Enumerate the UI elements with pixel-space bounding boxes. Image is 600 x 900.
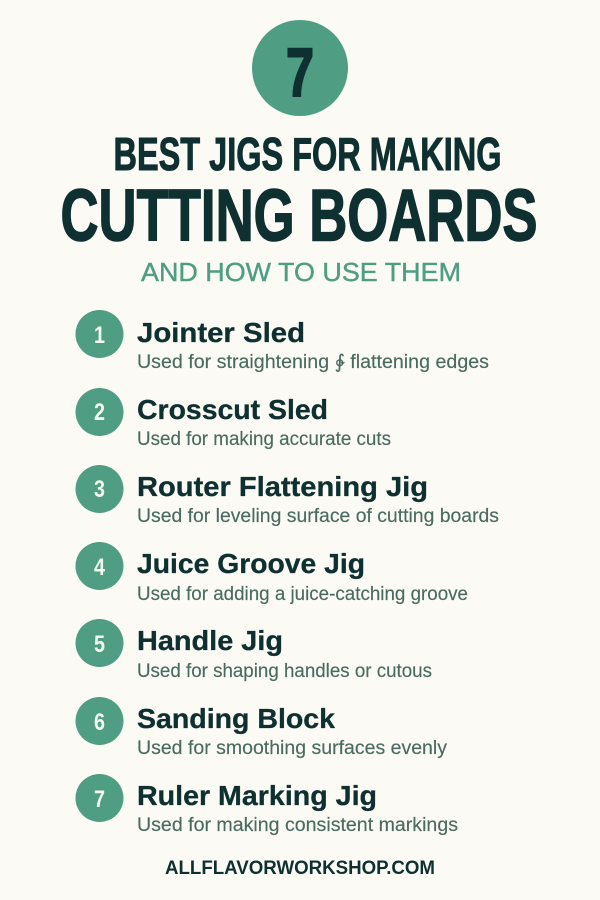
footer: website: ALLFLAVORWORKSHOP.COM: [165, 858, 435, 879]
item 6: sanding block: [76, 697, 447, 759]
item 7: ruler marking jig: [76, 774, 458, 836]
item 4: juice groove jig: [76, 542, 468, 605]
list of jigs: [76, 310, 499, 836]
badge: number 7: [252, 20, 348, 116]
item 5: handle jig: Used for shaping handles or cutous: [137, 661, 432, 682]
item 5: handle jig: Handle Jig: [137, 625, 283, 656]
subheading: AND HOW TO USE THEM: [141, 257, 461, 287]
item 5: handle jig: 5: [94, 631, 105, 658]
item 1: jointer sled: [76, 310, 489, 373]
item 5: handle jig: [76, 619, 432, 682]
item 1: jointer sled: 1: [94, 322, 105, 349]
item 6: sanding block: 6: [94, 709, 105, 736]
item 3: router flattening jig: Router Flattening Jig: [137, 471, 428, 502]
item 3: router flattening jig: Used for leveling surface of cutting boards: [137, 506, 499, 527]
item 3: router flattening jig: 3: [94, 476, 105, 503]
item 2: crosscut sled: [76, 388, 391, 450]
item 2: crosscut sled: 2: [94, 399, 105, 426]
item 6: sanding block: Sanding Block: [137, 703, 335, 734]
item 2: crosscut sled: Used for making accurate cuts: [137, 429, 391, 450]
item 7: ruler marking jig: Ruler Marking Jig: [137, 780, 377, 811]
item 4: juice groove jig: 4: [94, 554, 106, 581]
item 7: ruler marking jig: Used for making consistent markings: [137, 815, 458, 836]
item 3: router flattening jig: [76, 465, 499, 527]
item 7: ruler marking jig: 7: [94, 786, 105, 813]
item 4: juice groove jig: Used for adding a juice-catching groove: [137, 584, 468, 605]
item 1: jointer sled: Jointer Sled: [137, 317, 305, 348]
item 6: sanding block: Used for smoothing surfaces evenly: [137, 738, 447, 759]
item 2: crosscut sled: Crosscut Sled: [137, 394, 328, 425]
badge: number 7: 7: [286, 34, 314, 111]
item 1: jointer sled: Used for straightening ∲ flattening edges: [137, 351, 489, 373]
item 4: juice groove jig: Juice Groove Jig: [137, 548, 365, 579]
